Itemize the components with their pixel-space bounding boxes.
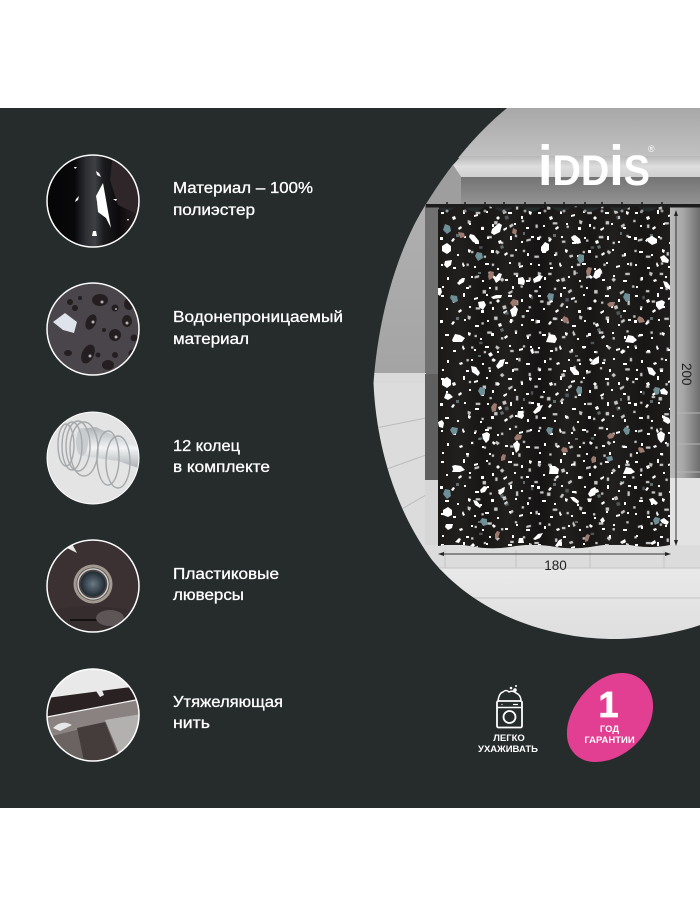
text: waterproof: материал [173, 331, 249, 348]
teal terrazzo chips [443, 224, 660, 526]
dark panel background [0, 108, 700, 808]
feature 4: eyelets [47, 540, 279, 632]
curtain rod with hooks [426, 202, 700, 210]
icon: water drops on fabric [47, 283, 139, 375]
badge: one year warranty [567, 673, 653, 762]
text: eyelets: люверсы [173, 587, 244, 604]
pink terrazzo chips [458, 228, 645, 542]
curtain eyelets [446, 210, 664, 212]
text: rings [173, 438, 270, 476]
icon: polyester fabric close-up [47, 155, 139, 247]
white terrazzo chips [436, 223, 671, 548]
text: easy care: УХАЖИВАТЬ [478, 744, 538, 755]
text: warranty: ГАРАНТИИ [584, 735, 635, 746]
icon: plastic eyelet [47, 540, 139, 632]
feature 2: waterproof [47, 283, 343, 375]
curtain with terrazzo print [438, 206, 670, 548]
feature 3: rings [47, 412, 270, 504]
logo: IDDIS: ® [648, 144, 655, 154]
pink blob [567, 673, 653, 762]
logo: IDDIS: iDDiS [538, 134, 650, 198]
text: weighted thread: нить [173, 715, 210, 732]
text: weighted thread [173, 694, 283, 732]
text: warranty: 1 [598, 684, 619, 725]
feature 1: material [47, 155, 313, 247]
photo: bathroom with shower curtain [370, 108, 700, 643]
dimension: width 180 [438, 552, 671, 573]
text: rings: в комплекте [173, 459, 270, 476]
text: material: полиэстер [173, 202, 255, 219]
text: waterproof [173, 309, 343, 348]
dimension: height 200 [674, 210, 694, 546]
text: material [173, 180, 313, 219]
text: warranty: ГОД [600, 724, 619, 735]
icon: hem with weight thread [47, 669, 141, 761]
text: warranty [584, 684, 635, 746]
badge: easy care [478, 685, 538, 755]
curtain folds shading [436, 206, 672, 550]
icon: rod with clear rings [47, 412, 141, 504]
text: eyelets: Пластиковые [173, 566, 279, 583]
text: weighted thread: Утяжеляющая [173, 694, 283, 711]
text: rings: 12 колец [173, 438, 240, 455]
dimension: height 200: 200 [679, 363, 694, 386]
text: waterproof: Водонепроницаемый [173, 309, 343, 326]
dimension: width 180: 180 [544, 558, 567, 573]
room: ceiling, cornice and walls [370, 108, 700, 643]
text: material: Материал – 100% [173, 180, 313, 197]
text: eyelets [173, 566, 279, 604]
feature 5: weighted thread [47, 669, 283, 761]
text: easy care [478, 733, 538, 755]
icon: washing machine [497, 685, 522, 728]
text: easy care: ЛЕГКО [493, 733, 525, 744]
